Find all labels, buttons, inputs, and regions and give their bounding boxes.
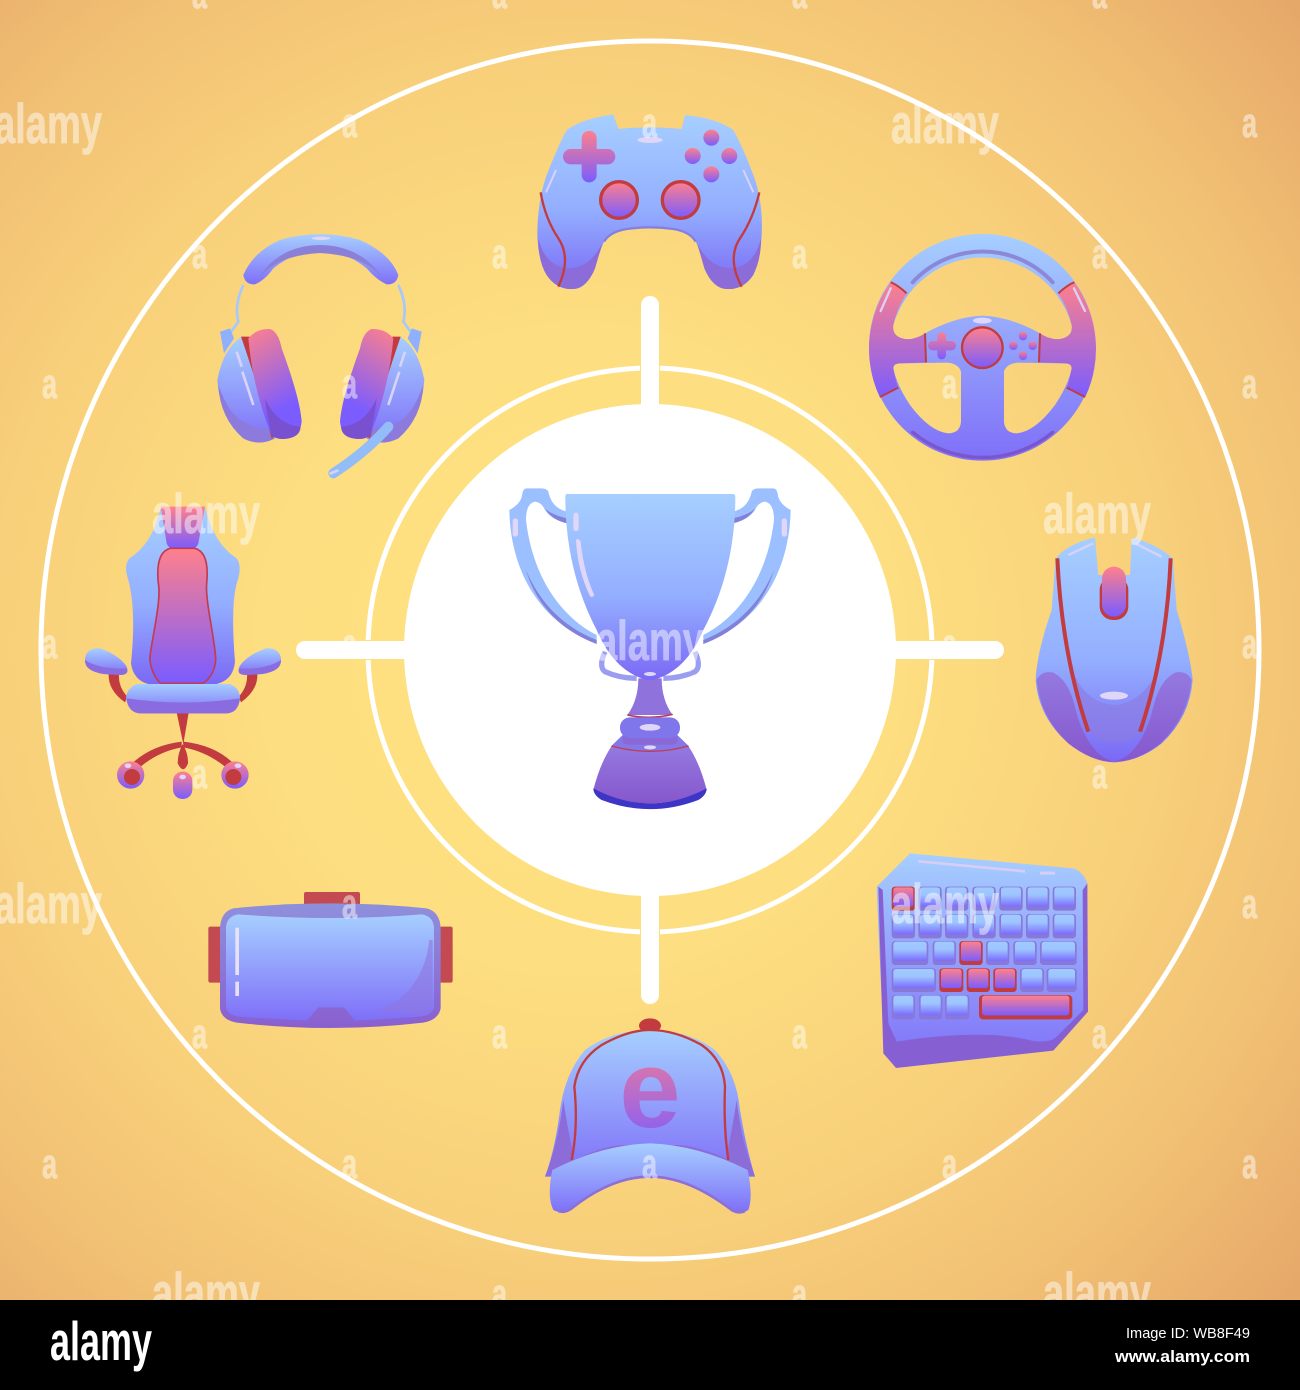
footer logo: alamy [50, 1310, 152, 1372]
wheel hub [962, 327, 1003, 368]
watermark pattern: a [642, 360, 657, 407]
gamepad sticks [601, 182, 699, 218]
watermark pattern: a [1242, 360, 1257, 407]
cap letter: e [619, 1028, 681, 1151]
icon: VR headset [208, 892, 453, 1028]
watermark pattern: a [1242, 880, 1257, 927]
watermark pattern: a [942, 1140, 957, 1187]
watermark pattern: a [642, 880, 657, 927]
watermark pattern: a [942, 620, 957, 667]
icon: keyboard [877, 853, 1088, 1068]
watermark pattern: alamy [152, 1261, 260, 1324]
mouse center shade [1075, 673, 1157, 742]
cap shape [545, 1018, 755, 1212]
chair left arm [85, 648, 127, 675]
keyboard keys [892, 887, 1077, 1019]
watermark pattern: a [342, 880, 357, 927]
watermark pattern: a [492, 490, 507, 537]
watermark pattern: a [192, 1010, 207, 1057]
wheel rim accents [881, 252, 1085, 457]
watermark pattern: a [42, 1140, 57, 1187]
icon: steering wheel [869, 234, 1096, 461]
watermark pattern: a [942, 360, 957, 407]
icon: baseball cap [545, 1018, 755, 1212]
mouse highlights [1068, 543, 1162, 700]
watermark pattern: a [192, 230, 207, 277]
watermark pattern: alamy [891, 872, 999, 935]
center white disk [404, 404, 896, 896]
icon: trophy [509, 488, 791, 809]
watermark pattern: a [42, 620, 57, 667]
trophy cup [565, 494, 735, 681]
gamepad face buttons [685, 130, 737, 182]
trophy stem [627, 678, 673, 715]
crosshair lines [296, 296, 1004, 1004]
wheel d-pad [928, 332, 956, 359]
keyboard highlights [918, 860, 1055, 875]
wheel highlight [973, 318, 992, 324]
cap seams [572, 1030, 728, 1160]
watermark pattern: a [492, 230, 507, 277]
footer bar [0, 1300, 1300, 1390]
watermark pattern: a [642, 99, 657, 146]
cap brim [550, 1143, 751, 1212]
footer url: www.alamy.com [1114, 1347, 1250, 1366]
chair seat [126, 684, 240, 713]
VR shell [220, 903, 441, 1028]
cap crown [545, 1030, 755, 1177]
watermark pattern: a [1242, 1140, 1257, 1187]
mouse red lines [1057, 558, 1171, 732]
VR highlights [235, 928, 239, 996]
chair wheels [117, 761, 249, 799]
watermark pattern: a [492, 1010, 507, 1057]
icon: mouse [1036, 537, 1193, 762]
wheel buttons [1009, 332, 1037, 360]
wheel left grip [869, 282, 926, 398]
watermark pattern: a [492, 750, 507, 797]
watermark pattern: a [792, 490, 807, 537]
watermark pattern: alamy [152, 482, 260, 545]
watermark pattern: a [1092, 750, 1107, 797]
gamepad body [537, 114, 762, 289]
watermark pattern: a [342, 99, 357, 146]
chair right arm [239, 648, 281, 675]
watermark pattern: alamy [891, 92, 999, 155]
cap side panels [545, 1100, 755, 1177]
wheel rim and spokes [869, 234, 1096, 461]
trophy highlights [513, 513, 787, 749]
VR visor [226, 914, 434, 1021]
keyboard body [877, 853, 1087, 1067]
headband [243, 234, 398, 284]
watermark pattern: a [1092, 230, 1107, 277]
watermark pattern: a [792, 750, 807, 797]
right ear cup [340, 328, 424, 442]
mouse body [1036, 537, 1193, 762]
watermark pattern: a [342, 620, 357, 667]
gamepad d-pad [563, 131, 615, 182]
watermark pattern: a [792, 230, 807, 277]
icon: gaming chair [85, 507, 281, 799]
VR visor shade [377, 940, 433, 1016]
inner ring [368, 368, 932, 932]
trophy left handle [509, 488, 597, 644]
trophy right handle [703, 488, 791, 644]
wheel right grip [1039, 282, 1096, 398]
footer image id: Image ID: WB8F49 [1126, 1325, 1250, 1342]
watermark pattern: a [1242, 620, 1257, 667]
gamepad grip lines [541, 192, 759, 287]
watermark pattern: a [42, 360, 57, 407]
gamepad inner arch [604, 227, 696, 242]
watermark pattern: a [642, 1140, 657, 1187]
gamepad highlights [546, 137, 753, 192]
watermark pattern: alamy [1043, 482, 1151, 545]
left ear cup [217, 328, 302, 442]
microphone boom [331, 427, 388, 473]
watermark pattern: a [192, 750, 207, 797]
chair headrest [161, 507, 205, 548]
icon: gamepad [537, 114, 762, 289]
watermark pattern: a [492, 1270, 507, 1317]
chair back [126, 507, 240, 684]
watermark pattern: a [792, 1010, 807, 1057]
watermark pattern: a [342, 1140, 357, 1187]
watermark pattern: alamy [596, 609, 704, 672]
trophy lower loops [602, 652, 698, 678]
cap button [639, 1018, 661, 1033]
watermark pattern: a [342, 360, 357, 407]
icon: headphones [217, 234, 424, 473]
gamepad lower grips [538, 238, 761, 289]
watermark pattern: alamy [1043, 1261, 1151, 1324]
chair back pad [150, 548, 216, 683]
mouse scroll wheel [1100, 567, 1128, 620]
headset wires [230, 285, 412, 333]
watermark pattern: a [1242, 99, 1257, 146]
VR straps [208, 892, 453, 983]
mouse side panels [1037, 672, 1192, 762]
watermark pattern: a [792, 1270, 807, 1317]
watermark pattern: a [1092, 1010, 1107, 1057]
chair base [109, 673, 257, 769]
trophy base [593, 714, 707, 809]
